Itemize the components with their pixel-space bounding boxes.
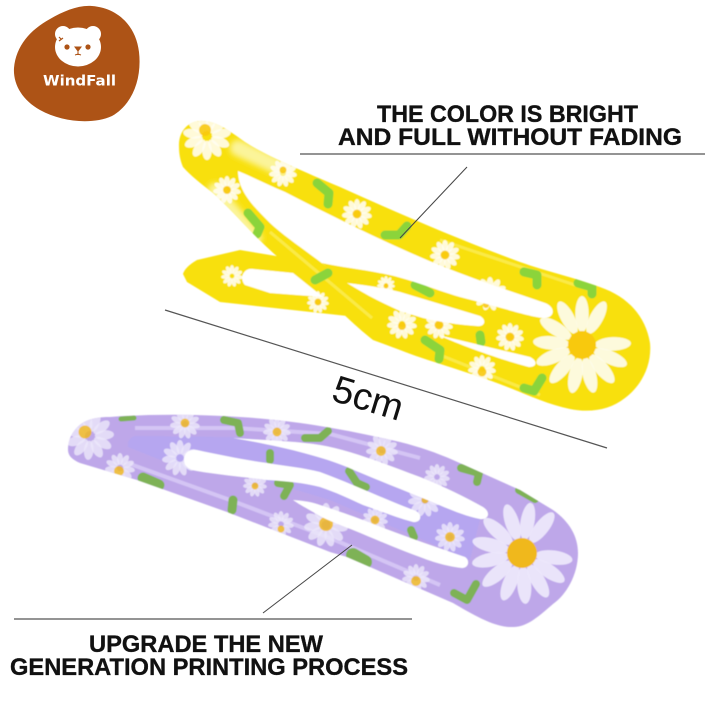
clip slots <box>238 171 553 367</box>
heading: colour callout <box>338 101 682 151</box>
dimension line and 5cm label <box>165 310 607 448</box>
small daisies <box>177 107 524 383</box>
highlights <box>270 232 590 395</box>
logo: WindFall bear badge <box>14 6 140 121</box>
purple hair clip <box>59 405 585 635</box>
leaves <box>121 418 535 600</box>
heading: colour callout: AND FULL WITHOUT FADING <box>338 124 682 151</box>
highlights <box>130 428 440 585</box>
heading: printing callout: UPGRADE THE NEW <box>89 631 323 658</box>
clip body with print <box>178 120 652 412</box>
heading: printing callout: GENERATION PRINTING PROCESS <box>10 654 408 681</box>
clip slots <box>184 438 488 568</box>
leaves <box>248 183 592 391</box>
pale fade near tip <box>215 148 285 238</box>
inner window <box>265 448 419 536</box>
yellow hair clip <box>178 120 652 412</box>
clip body with print <box>59 405 585 635</box>
small daisies <box>59 405 465 592</box>
logo: WindFall bear badge: WindFall <box>43 74 116 90</box>
large daisy <box>472 502 573 604</box>
large daisy <box>533 296 631 394</box>
heading: colour callout: THE COLOR IS BRIGHT <box>377 101 638 128</box>
heading: printing callout <box>10 631 408 681</box>
dimension line and 5cm label: 5cm <box>327 368 408 430</box>
